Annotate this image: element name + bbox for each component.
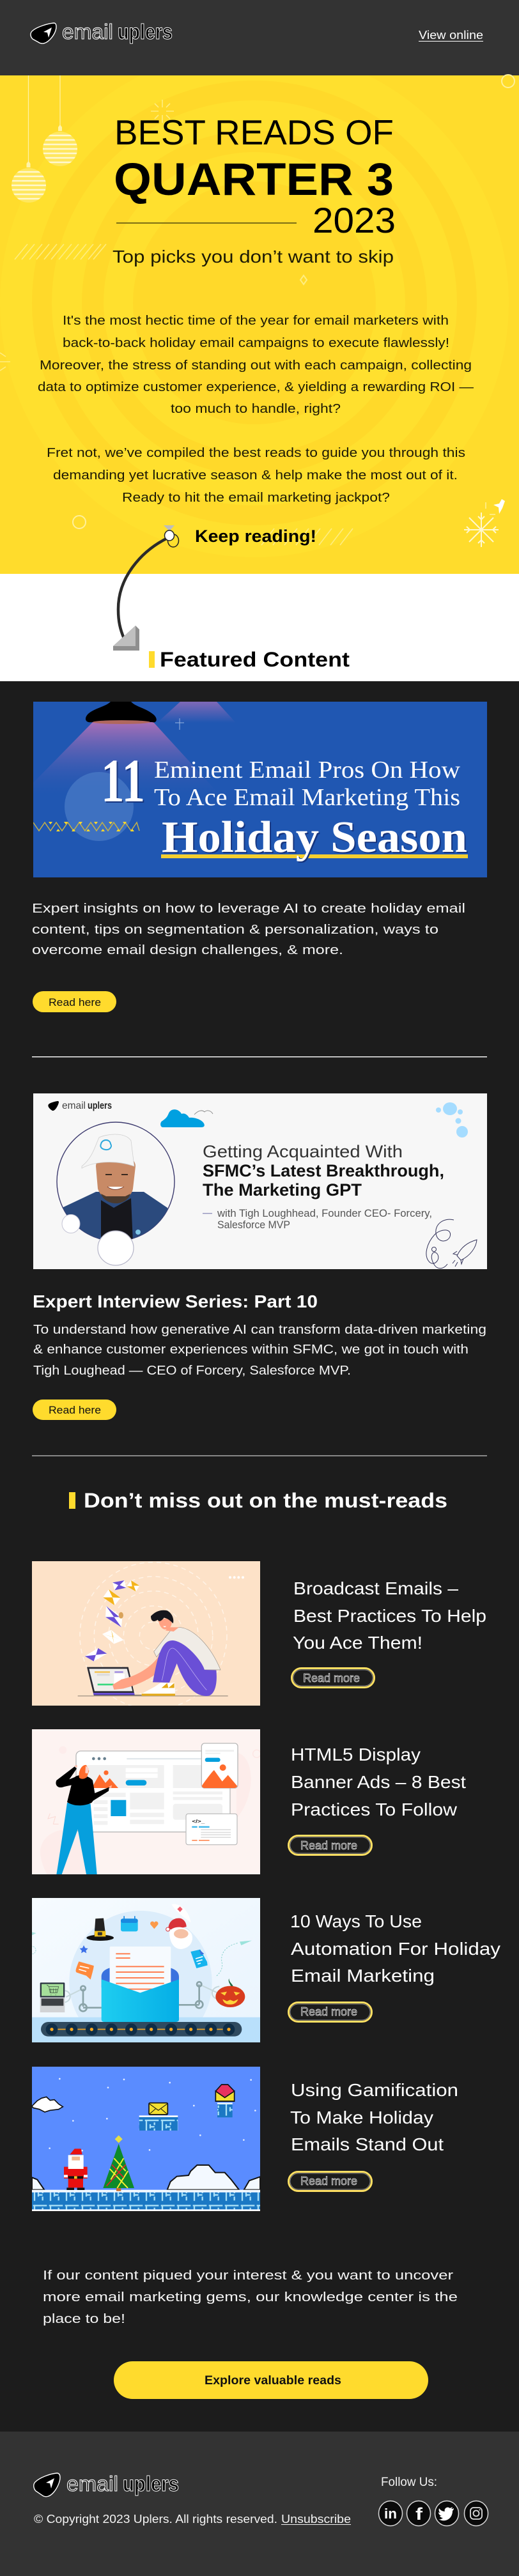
banner text: Holiday Season [162,813,467,862]
intro paragraph 1: It's the most hectic time of the year for email marketers with [63,314,449,328]
banner logo [48,1100,112,1111]
icon: snowflake and star [464,499,505,547]
social icons [378,2501,488,2526]
button: read here 1 [33,991,116,1012]
concentric ring background [0,49,509,557]
banner logo: uplers [88,1100,112,1111]
intro paragraph 1: too much to handle, right? [171,402,341,416]
ground [32,2190,260,2211]
article card 4 text: Using Gamification [291,2080,458,2100]
article card 2 text: Banner Ads – 8 Best [291,1772,466,1792]
pumpkin [215,1978,245,2007]
banner headline: SFMC’s Latest Breakthrough, [203,1161,444,1180]
article card 4 text: Emails Stand Out [291,2134,444,2154]
article 2 description: & enhance customer experiences within SFMC, we got in touch with [33,1343,469,1357]
illustration: HTML5 banner ads [32,1729,261,1874]
intro paragraph 2: Fret not, we’ve compiled the best reads to guide you through this [47,446,465,460]
conveyor belt [41,2022,242,2037]
pixel santa [64,2148,88,2190]
button: read more 1: Read more [303,1672,360,1685]
article 2 heading: Expert Interview Series: Part 10 [33,1292,318,1311]
icon: cloud [160,1109,213,1127]
banner headline: The Marketing GPT [203,1180,362,1199]
button: read here 2 [33,1400,116,1420]
title: QUARTER 3 [114,155,394,205]
banner: holiday season article [33,702,487,877]
title: 2023 [313,200,396,240]
illustration: broadcast emails [32,1561,260,1709]
article card 1 text: Best Practices To Help [293,1606,486,1626]
person [112,1610,221,1696]
browser window [76,1751,230,1832]
panel: yellow hero [0,49,519,574]
follow us label: Follow Us: [381,2476,437,2489]
logo: email uplers [31,20,173,43]
illustration: pixel gamification scene [32,2067,260,2211]
article 1 description [32,902,465,957]
code card [186,1814,237,1845]
banner logo: email [62,1100,86,1111]
subtitle: Top picks you don’t want to skip [112,247,394,266]
article card 4 text [290,2080,458,2154]
copyright line: © Copyright 2023 Uplers. All rights reserved. [34,2513,277,2526]
portrait: Tigh Loughhead [57,1122,174,1265]
heading: featured content: Featured Content [160,648,350,671]
logo: email uplers: uplers [118,20,173,43]
view online link: View online [419,29,483,42]
icon: rocket scribble [426,1219,477,1269]
article card 3 text: Automation For Holiday [291,1939,500,1959]
article 2 description [33,1323,486,1378]
icon: twitter [435,2501,459,2526]
button: read more 4 [289,2171,372,2191]
article card 2 text: HTML5 Display [291,1745,421,1764]
banner text [105,760,468,863]
banner: SFMC interview [33,1093,487,1269]
robot arms [65,1982,219,2011]
document icon [190,1950,208,1968]
article 1 description: overcome email design challenges, & more. [32,943,343,957]
article card 1 text: Broadcast Emails – [293,1578,458,1598]
intro paragraph 1 [38,314,474,416]
decorative sparkles, rings and hatching [0,75,515,545]
intro paragraph 1: data to optimize customer experience, & yielding a rewarding ROI — [38,380,474,394]
person at whiteboard [56,1765,112,1874]
footer logo [34,2472,179,2497]
banner text: 11 [101,746,145,815]
pixel christmas tree [103,2135,134,2191]
flying envelopes [85,1580,139,1662]
title: BEST READS OF [114,112,394,152]
button: read more 3 [289,2003,372,2022]
button: read here 2: Read here [49,1404,101,1416]
article card 1 text [293,1578,486,1653]
button: read more 2: Read more [300,1839,357,1852]
article card 2 text [291,1745,466,1819]
banner text: To Ace Email Marketing This [154,784,460,811]
icon: hanging baubles [12,75,77,203]
icon: instagram [464,2501,488,2526]
panel: dark content area [0,681,519,2432]
article card 3 text [290,1911,500,1986]
banner headline: with Tigh Loughhead, Founder CEO- Forcery, [217,1207,432,1219]
copyright line: Unsubscribe [281,2513,351,2526]
keep reading label: Keep reading! [195,527,316,546]
logo: email uplers: email [62,20,113,43]
envelope and letter [102,1947,179,2022]
article 1 description: content, tips on segmentation & personalization, ways to [32,923,438,937]
banner headline: Salesforce MVP [217,1219,290,1231]
button: read more 1 [291,1668,375,1687]
phone ad card [201,1743,238,1788]
illustration: holiday automation [28,1898,260,2053]
article 2 description: To understand how generative AI can transform data-driven marketing [33,1323,486,1337]
closing paragraph: place to be! [43,2312,125,2326]
laptop with cart [40,1982,65,2012]
code card: </>_ [192,1819,206,1824]
footer logo: uplers [123,2472,179,2495]
closing paragraph [43,2269,458,2326]
star and chat icons [76,1945,94,1980]
banner headline [203,1142,444,1231]
intro paragraph 2 [47,446,465,505]
ice platforms [139,2102,233,2131]
button: explore valuable reads [114,2361,428,2399]
button: explore valuable reads: Explore valuable reads [205,2374,341,2387]
article 2 description: Tigh Loughead — CEO of Forcery, Salesforce MVP. [33,1364,351,1378]
icon: linkedin: in [384,2506,397,2522]
banner headline: Getting Acquainted With [203,1142,403,1161]
button: read more 3: Read more [300,2005,357,2018]
footer logo: email [66,2472,118,2495]
cloud [32,2097,63,2112]
pixel envelopes [149,2085,235,2189]
heading: must-reads: Don’t miss out on the must-reads [84,1489,447,1512]
icon: linkedin [378,2501,403,2526]
intro paragraph 2: demanding yet lucrative season & help make the most out of it. [53,468,458,482]
banner text: Eminent Email Pros On How [154,757,461,783]
dashed signal rings [80,1562,227,1709]
banner text: 11 [102,748,146,816]
article card 1 text: You Ace Them! [293,1633,422,1653]
banner text: Holiday Season [163,814,469,863]
snow dots [49,2078,256,2152]
button: read more 2 [289,1835,372,1855]
icon: bubbles [436,1102,468,1138]
icon: facebook: f [415,2504,423,2524]
santa [166,1904,192,1949]
lamp and light cones [33,702,236,841]
zigzag pattern [33,822,139,831]
intro paragraph 1: Moreover, the stress of standing out with each campaign, collecting [40,359,472,373]
button: read here 1: Read here [49,996,101,1008]
article 1 description: Expert insights on how to leverage AI to create holiday email [32,902,465,916]
button: read more 4: Read more [300,2175,357,2187]
pilgrim hat [86,1918,114,1941]
intro paragraph 2: Ready to hit the email marketing jackpot? [122,491,390,505]
article card 2 text: Practices To Follow [291,1800,458,1819]
calendar icon [121,1916,138,1931]
arrow: curved pointer to featured content [113,525,179,651]
article card 4 text: To Make Holiday [290,2108,433,2127]
header bar [0,0,519,75]
intro paragraph 1: back-to-back holiday email campaigns to execute flawlessly! [63,336,449,350]
panel: footer [0,2432,519,2576]
panel: white band [0,574,519,681]
icon: heart [150,1922,159,1929]
article card 3 text: Email Marketing [291,1966,435,1986]
icon: facebook [407,2501,431,2526]
article card 3 text: 10 Ways To Use [290,1911,422,1931]
laptop [87,1667,142,1696]
closing paragraph: If our content piqued your interest & you want to uncover [43,2269,453,2283]
closing paragraph: more email marketing gems, our knowledge center is the [43,2290,458,2304]
snow hills [32,2165,260,2190]
title [114,112,396,240]
paper plane [28,1932,252,1977]
